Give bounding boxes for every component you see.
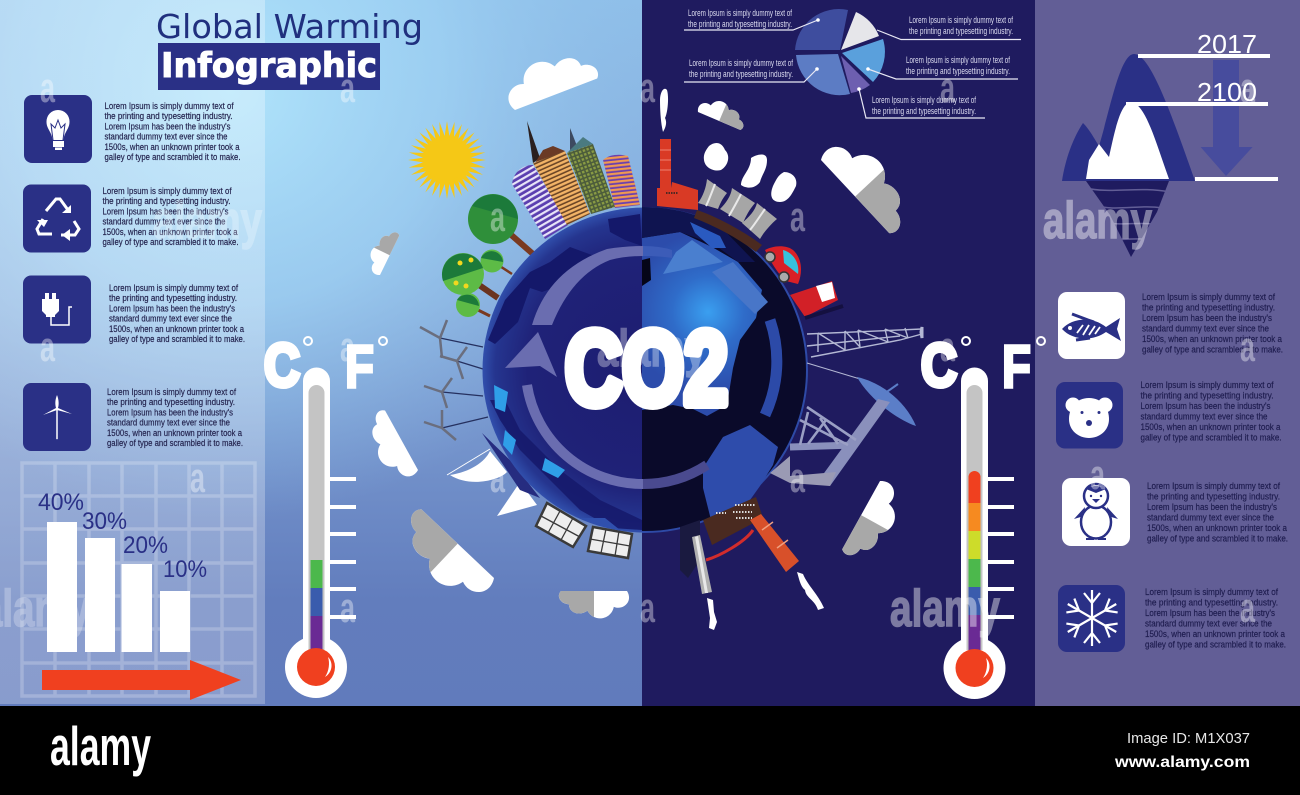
text block: plug: Lorem Ipsum is simply dummy text of — [109, 283, 238, 293]
icon: polar bear — [1056, 382, 1123, 448]
stock photo watermarks: alamy — [1043, 192, 1152, 250]
icon: electric plug — [23, 276, 91, 344]
text block: turbine: Lorem Ipsum has been the industry's — [107, 407, 233, 417]
text block: turbine: Lorem Ipsum is simply dummy text of — [107, 387, 236, 397]
text block: bear: the printing and typesetting industry. — [1140, 390, 1274, 400]
thermometer: left cool: F — [345, 333, 374, 400]
solar panels — [536, 503, 632, 558]
text block: plug: the printing and typesetting industry. — [109, 293, 237, 303]
text block: bulb — [104, 101, 240, 162]
stock photo watermarks: a — [1240, 64, 1255, 111]
pie callouts: Lorem Ipsum is simply dummy text of — [909, 15, 1013, 25]
pie callouts: Lorem Ipsum is simply dummy text of — [688, 8, 792, 18]
stock photo watermarks: a — [790, 193, 805, 240]
text block: recycle: the printing and typesetting industry. — [102, 196, 230, 206]
bar chart: 40% — [38, 489, 84, 516]
stock photo watermarks: a — [940, 64, 955, 111]
pie callouts — [684, 8, 1021, 118]
text block: fish: the printing and typesetting industry. — [1142, 302, 1275, 312]
text block: snowflake: standard dummy text ever since the — [1145, 618, 1272, 628]
trees — [442, 194, 533, 317]
stock photo watermarks — [0, 64, 1255, 638]
text block: snowflake: Lorem Ipsum is simply dummy text of — [1145, 587, 1278, 597]
globe: night side — [642, 207, 808, 533]
pie callouts: the printing and typesetting industry. — [909, 26, 1013, 36]
text block: snowflake: Lorem Ipsum has been the industry's — [1145, 608, 1275, 618]
stock photo watermarks: a — [1240, 323, 1255, 370]
text block: penguin: 1500s, when an unknown printer took a — [1147, 523, 1287, 533]
panel: left text column tint — [0, 0, 265, 704]
city skyscrapers — [512, 121, 640, 239]
mining pickaxe and truss — [770, 363, 916, 486]
iceberg with sea level markers — [1062, 29, 1278, 257]
icon: recycle — [23, 184, 91, 252]
title: Global Warming: Global Warming — [156, 7, 423, 46]
text block: bear: galley of type and scrambled it to make. — [1140, 432, 1282, 442]
text block: recycle: galley of type and scrambled it to make. — [102, 237, 238, 247]
iceberg with sea level markers: 2100 — [1197, 77, 1257, 107]
stock photo watermarks: a — [40, 64, 55, 111]
bar chart: 10% — [163, 556, 207, 583]
stock photo watermarks: a — [490, 193, 505, 240]
stock photo watermarks: a — [190, 454, 205, 501]
text block: fish: standard dummy text ever since the — [1142, 323, 1269, 333]
text block: turbine — [107, 387, 243, 448]
crane truss — [807, 327, 922, 357]
stock photo watermarks: a — [340, 323, 355, 370]
stock photo watermarks: a — [940, 323, 955, 370]
stock photo watermarks: a — [340, 64, 355, 111]
text block: turbine: the printing and typesetting industry. — [107, 397, 235, 407]
stock photo watermarks: a — [790, 454, 805, 501]
title: Infographic banner: Infographic — [161, 46, 377, 86]
text block: snowflake — [1145, 587, 1286, 649]
car — [765, 246, 801, 284]
stock photo watermarks: a — [490, 454, 505, 501]
text block: plug: galley of type and scrambled it to make. — [109, 334, 245, 344]
pie callouts: Lorem Ipsum is simply dummy text of — [689, 58, 793, 68]
iceberg with sea level markers: 2017 — [1197, 29, 1257, 59]
text block: recycle: 1500s, when an unknown printer took a — [102, 227, 238, 237]
bar chart: 20% — [123, 532, 168, 559]
text block: fish: 1500s, when an unknown printer took a — [1142, 334, 1282, 344]
text block: penguin — [1147, 481, 1288, 543]
globe: CO2 cycle arrows — [505, 240, 777, 484]
sailboats — [447, 433, 540, 516]
text block: fish — [1142, 292, 1283, 354]
panel: right text column — [1035, 0, 1300, 706]
text block: recycle: standard dummy text ever since the — [102, 217, 226, 227]
text block: plug — [109, 283, 245, 344]
icon: wind turbine — [23, 383, 91, 451]
pie callouts: the printing and typesetting industry. — [872, 106, 976, 116]
stock photo watermarks: a — [640, 64, 655, 111]
smoke puffs — [660, 89, 824, 630]
pie callouts: Lorem Ipsum is simply dummy text of — [872, 95, 976, 105]
icon: penguin — [1062, 478, 1130, 546]
text block: bear — [1140, 380, 1282, 442]
text block: snowflake: galley of type and scrambled it to make. — [1145, 639, 1286, 649]
text block: fish: galley of type and scrambled it to make. — [1142, 344, 1283, 354]
stock photo watermarks: a — [640, 584, 655, 631]
text block: bear: 1500s, when an unknown printer took a — [1140, 422, 1280, 432]
icon: sun — [392, 105, 502, 215]
stock photo watermarks: alamy — [890, 580, 1000, 638]
stock photo watermarks: a — [340, 584, 355, 631]
text block: plug: standard dummy text ever since the — [109, 314, 232, 324]
globe: CO2 label: CO2 — [565, 311, 728, 427]
text block: turbine: galley of type and scrambled it to make. — [107, 438, 243, 448]
wind turbines row — [420, 320, 488, 440]
text block: fish: Lorem Ipsum is simply dummy text of — [1142, 292, 1275, 302]
stock photo watermarks: alamy — [153, 192, 262, 250]
text block: snowflake: 1500s, when an unknown printer took a — [1145, 629, 1285, 639]
text block: recycle: Lorem Ipsum has been the industry's — [102, 206, 229, 216]
text block: turbine: 1500s, when an unknown printer took a — [107, 428, 242, 438]
icon: fish — [1058, 292, 1125, 359]
stock photo watermarks: a — [40, 323, 55, 370]
stock photo watermarks: a — [1090, 451, 1105, 498]
cooling towers — [694, 179, 777, 252]
thermometer: right hot: F — [1002, 333, 1031, 400]
text block: bear: standard dummy text ever since the — [1140, 411, 1268, 421]
text block: plug: 1500s, when an unknown printer took a — [109, 324, 244, 334]
globe: continents — [488, 214, 642, 532]
footer bar — [0, 706, 1300, 795]
text block: penguin: the printing and typesetting industry. — [1147, 492, 1280, 502]
thermometer: right hot — [921, 332, 1045, 699]
text block: turbine: standard dummy text ever since the — [107, 418, 230, 428]
text block: bear: Lorem Ipsum is simply dummy text of — [1140, 380, 1274, 390]
stock photo watermarks: a — [1240, 584, 1255, 631]
globe — [482, 207, 808, 532]
text block: bulb: galley of type and scrambled it to make. — [104, 152, 240, 162]
footer bar: www.alamy.com — [1114, 754, 1250, 771]
text block: recycle — [102, 186, 238, 247]
bar chart: 30% — [82, 508, 127, 535]
pie callouts: the printing and typesetting industry. — [689, 69, 793, 79]
footer bar: alamy — [50, 715, 151, 777]
text block: plug: Lorem Ipsum has been the industry's — [109, 303, 235, 313]
thermometer: left cool: C — [264, 332, 300, 399]
text block: bulb: standard dummy text ever since the — [104, 132, 228, 142]
text block: snowflake: the printing and typesetting industry. — [1145, 598, 1278, 608]
text block: penguin: Lorem Ipsum has been the industry's — [1147, 502, 1277, 512]
text block: penguin: Lorem Ipsum is simply dummy text of — [1147, 481, 1280, 491]
icon: snowflake — [1058, 585, 1125, 652]
text block: bulb: Lorem Ipsum is simply dummy text of — [104, 101, 234, 111]
text block: bulb: the printing and typesetting industry. — [104, 111, 232, 121]
stock photo watermarks: alamy — [597, 320, 706, 378]
pie callouts: Lorem Ipsum is simply dummy text of — [906, 55, 1010, 65]
factory with chimney — [657, 139, 698, 210]
footer bar: Image ID: M1X037 — [1127, 730, 1250, 747]
arrow: red trend arrow — [42, 660, 241, 700]
panel: warm sky background — [0, 0, 642, 706]
panel: dark polluted background — [642, 0, 1035, 706]
thermometer: left cool — [264, 332, 387, 698]
text block: penguin: standard dummy text ever since the — [1147, 512, 1274, 522]
bar chart — [22, 463, 255, 696]
clouds — [359, 43, 922, 618]
pie chart — [795, 9, 885, 95]
thermometer: right hot: C — [921, 332, 957, 399]
text block: bulb: 1500s, when an unknown printer took a — [104, 142, 240, 152]
text block: bulb: Lorem Ipsum has been the industry's — [104, 121, 231, 131]
pie callouts: the printing and typesetting industry. — [906, 66, 1010, 76]
text block: recycle: Lorem Ipsum is simply dummy text of — [102, 186, 232, 196]
pie callouts: the printing and typesetting industry. — [688, 19, 792, 29]
red machine — [790, 281, 843, 318]
icon: light bulb — [24, 95, 92, 163]
bottom factory with pipes — [680, 497, 799, 594]
text block: fish: Lorem Ipsum has been the industry's — [1142, 313, 1272, 323]
text block: bear: Lorem Ipsum has been the industry's — [1140, 401, 1271, 411]
